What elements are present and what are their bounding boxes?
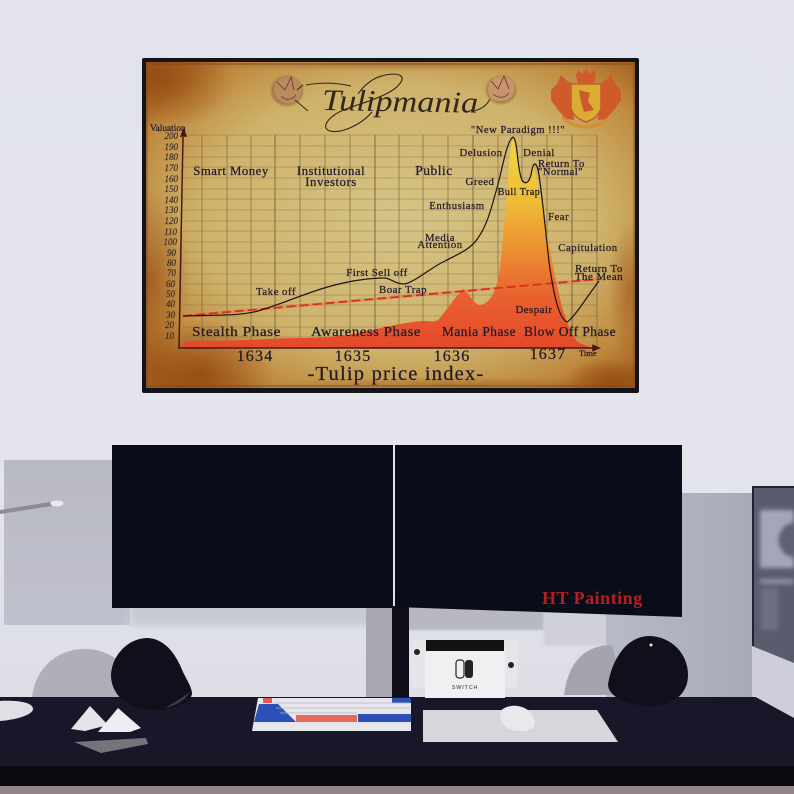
y axis labels: 200	[164, 131, 178, 141]
curve stage labels: Fear	[548, 211, 569, 223]
y axis labels	[150, 124, 186, 341]
chart title: Tulip price index: -Tulip price index-	[308, 363, 484, 385]
price area chart	[183, 139, 590, 348]
y axis labels: 50	[166, 289, 176, 299]
column headings: who buys: Investors	[305, 175, 357, 189]
icon: right tulip	[474, 76, 516, 111]
y axis labels: 100	[164, 237, 178, 247]
column headings: who buys: Public	[415, 163, 453, 178]
curve stage labels: Boar Trap	[379, 284, 427, 296]
poster frame	[142, 58, 639, 393]
column headings: who buys: Smart Money	[193, 164, 269, 178]
y axis labels: 60	[166, 279, 176, 289]
curve stage labels: "Normal"	[538, 167, 583, 178]
column headings: who buys	[193, 163, 453, 189]
game console dock	[410, 640, 518, 698]
phase labels: Awareness Phase	[311, 324, 421, 339]
phase labels	[192, 324, 616, 340]
left speaker	[111, 638, 192, 710]
wall lamp arm	[0, 500, 64, 514]
curve stage labels: Capitulation	[558, 242, 618, 254]
y axis labels: 110	[164, 227, 177, 237]
PC case	[752, 486, 794, 718]
y axis labels: 10	[165, 331, 174, 341]
desk	[0, 697, 794, 794]
curve stage labels: Enthusiasm	[429, 200, 485, 212]
mouse	[500, 706, 535, 731]
curve stage labels: "New Paradigm !!!"	[471, 125, 565, 136]
curve stage labels: Media	[425, 232, 455, 244]
x axis years: 1635	[335, 348, 371, 365]
monitor stand pole	[392, 606, 409, 698]
curve stage labels: Return To	[538, 159, 585, 170]
x axis years: Time	[579, 348, 597, 358]
framed poster: Tulipmania	[85, 30, 655, 430]
phase labels: Blow Off Phase	[524, 324, 616, 339]
y axis labels: 40	[166, 299, 176, 309]
y axis labels: 120	[164, 216, 178, 226]
y axis labels: 90	[167, 248, 176, 258]
chart grid	[183, 135, 597, 348]
y axis labels: Valuation	[150, 124, 186, 134]
y axis labels: 150	[164, 184, 178, 194]
curve stage labels: Despair	[515, 304, 553, 316]
curve stage labels: Delusion	[460, 147, 503, 159]
x axis years: 1637	[530, 346, 566, 363]
mouse pad	[423, 710, 618, 742]
curve stage labels: Return To	[575, 263, 623, 275]
curve stage labels: The Mean	[575, 271, 623, 283]
title: Tulipmania	[306, 74, 478, 132]
curve stage labels: Bull Trap	[498, 187, 540, 198]
curve stage labels: First Sell off	[346, 267, 408, 279]
mean trend line (dashed red)	[183, 279, 600, 316]
game console dock: SWITCH	[452, 685, 478, 691]
curve stage labels	[256, 125, 623, 316]
y axis labels: 130	[164, 205, 178, 215]
x axis years: 1634	[237, 348, 273, 365]
y axis labels: 160	[164, 174, 178, 184]
y axis labels: 190	[164, 142, 178, 152]
y axis labels: 30	[165, 310, 176, 320]
column headings: who buys: Institutional	[297, 164, 365, 178]
y axis labels: 140	[164, 195, 178, 205]
price curve (black line)	[183, 137, 599, 322]
curve stage labels: Denial	[523, 147, 555, 159]
icon: left tulip	[271, 76, 308, 111]
y axis labels: 70	[167, 268, 176, 278]
axes	[179, 130, 599, 350]
curve stage labels: Greed	[466, 176, 495, 188]
y axis labels: 20	[165, 320, 174, 330]
keyboard	[252, 698, 411, 731]
watermark: HT Painting: HT Painting	[542, 588, 643, 608]
parchment background	[85, 30, 655, 430]
small white triangle ornaments	[71, 706, 148, 753]
y axis labels: 180	[164, 152, 178, 162]
x axis years: 1636	[434, 348, 470, 365]
x axis years	[237, 346, 597, 365]
curve stage labels: Attention	[417, 239, 463, 251]
y axis labels: 80	[167, 258, 176, 268]
right monitor	[395, 445, 682, 617]
icon: coat of arms	[551, 69, 621, 127]
phase labels: Mania Phase	[442, 324, 516, 339]
phase labels: Stealth Phase	[192, 325, 281, 340]
title: Tulipmania: Tulipmania	[322, 84, 478, 120]
lamp base	[0, 701, 33, 721]
curve stage labels: Take off	[256, 286, 296, 298]
right speaker	[608, 636, 688, 706]
y axis labels: 170	[164, 163, 178, 173]
left monitor	[112, 445, 393, 608]
